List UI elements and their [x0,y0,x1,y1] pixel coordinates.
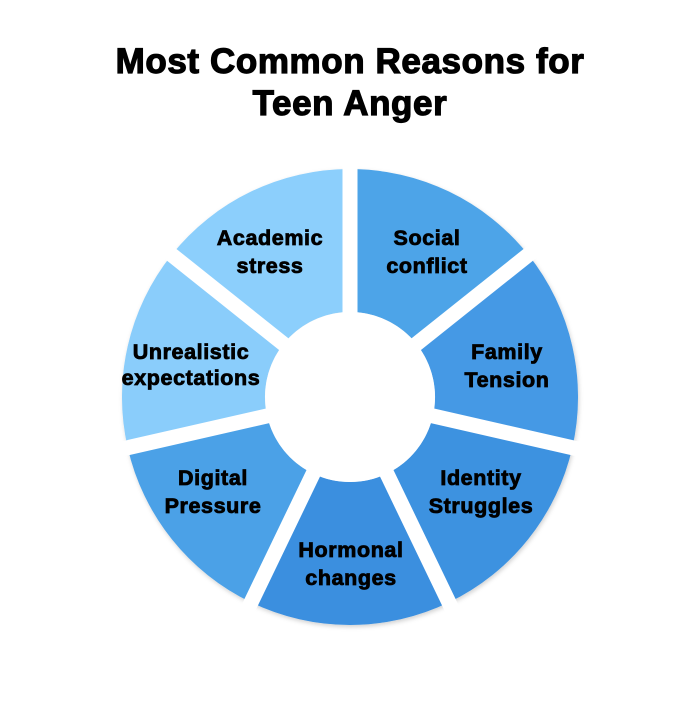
segment: digital pressure [128,416,313,602]
label: unrealistic expectations: Unrealistic [133,340,249,364]
label: academic stress: Academic [217,226,323,250]
labels [122,226,550,590]
title: Teen Anger [253,84,447,123]
label: family tension: Family [471,340,543,364]
donut chart [119,160,581,625]
label: digital pressure: Digital [178,466,248,490]
label: identity struggles: Identity [440,466,522,490]
segment: academic stress [172,169,350,344]
segment: social conflict [350,169,528,344]
label: identity struggles: Struggles [429,494,533,518]
label: academic stress: stress [237,254,303,278]
segment: identity struggles [387,416,572,602]
label: family tension: Tension [464,368,550,392]
segment: hormonal changes [251,474,449,625]
label: social conflict: Social [394,226,460,250]
title: Most Common Reasons for [116,42,584,81]
segment: family tension [416,255,578,448]
segment: unrealistic expectations [122,255,284,448]
label: hormonal changes: changes [305,566,397,590]
label: social conflict: conflict [386,254,468,278]
label: digital pressure: Pressure [165,494,261,518]
label: hormonal changes: Hormonal [298,538,404,562]
label: unrealistic expectations: expectations [122,366,260,390]
title [116,42,584,123]
